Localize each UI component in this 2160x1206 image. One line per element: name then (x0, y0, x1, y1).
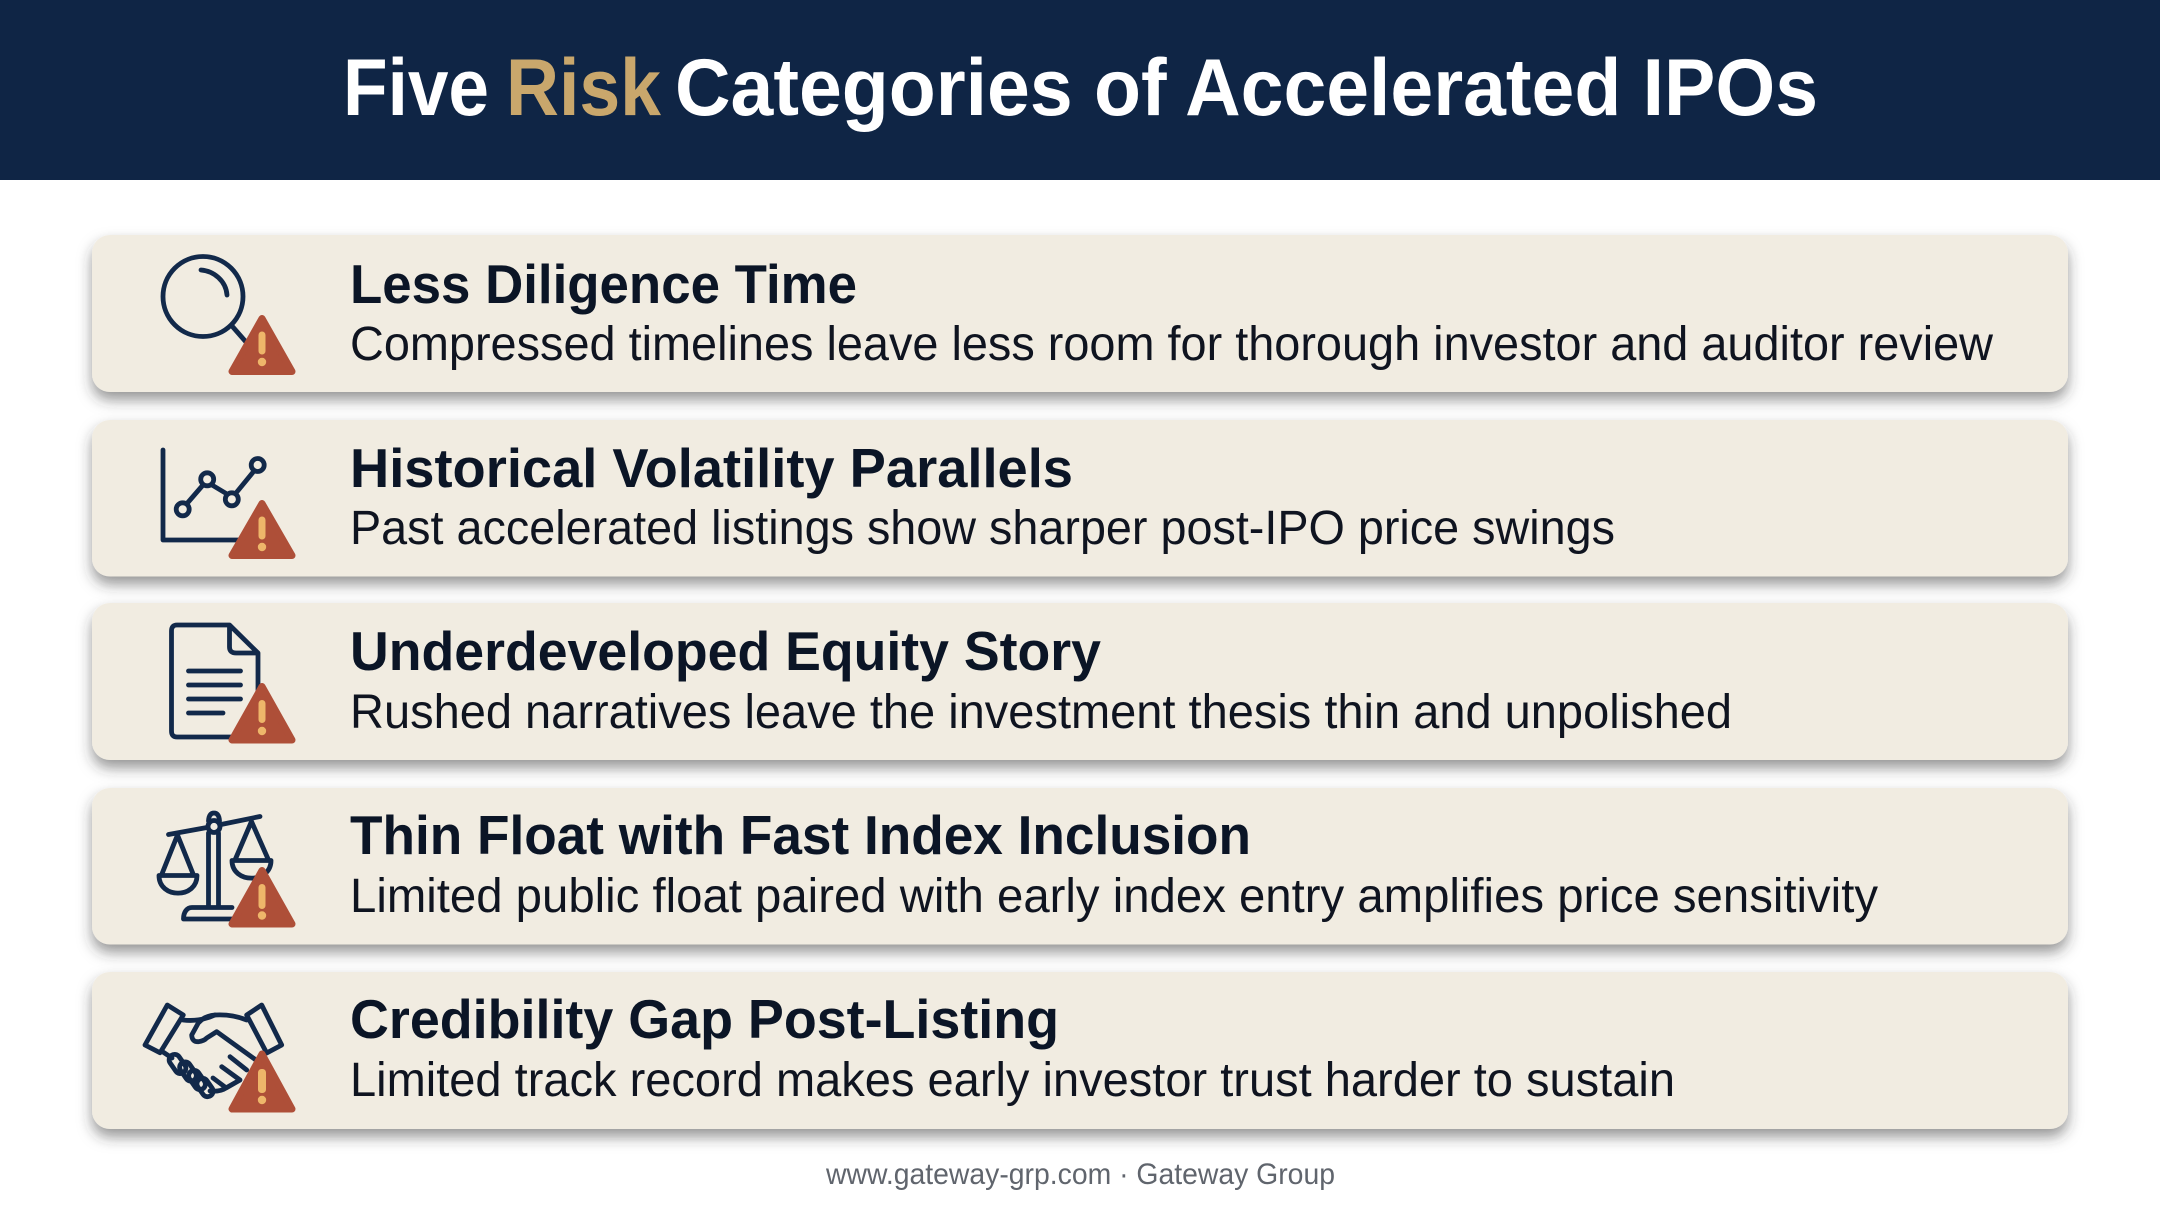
header band (0, 0, 2160, 180)
description: Limited track record makes early investor trust harder to sustain (350, 1054, 1675, 1107)
panel: historical volatility parallels (92, 420, 2068, 576)
title: Categories of Accelerated IPOs (675, 43, 1818, 133)
icon: document with warning (172, 625, 292, 740)
panel: credibility gap post-listing (92, 972, 2068, 1129)
icon: line chart with warning (163, 450, 292, 556)
heading: Credibility Gap Post-Listing (350, 988, 1059, 1050)
icon: scales with warning (159, 813, 292, 924)
description: Past accelerated listings show sharper post-IPO price swings (350, 502, 1615, 555)
panel: underdeveloped equity story (92, 603, 2068, 760)
icon: handshake with warning (145, 1005, 292, 1109)
panel: thin float with fast index inclusion (92, 788, 2068, 944)
title: Risk (506, 43, 662, 133)
description: Limited public float paired with early index entry amplifies price sensitivity (350, 870, 1878, 923)
heading: Historical Volatility Parallels (350, 437, 1073, 499)
heading: Thin Float with Fast Index Inclusion (350, 804, 1251, 866)
heading: Underdeveloped Equity Story (350, 620, 1101, 682)
description: Compressed timelines leave less room for thorough investor and auditor review (350, 318, 1993, 371)
heading: Less Diligence Time (350, 253, 857, 315)
footer: www.gateway-grp.com · Gateway Group (825, 1158, 1335, 1191)
description: Rushed narratives leave the investment thesis thin and unpolished (350, 686, 1732, 739)
title: Five (343, 43, 489, 133)
panel: less diligence time (92, 235, 2068, 392)
icon: magnifier with warning (163, 256, 292, 372)
